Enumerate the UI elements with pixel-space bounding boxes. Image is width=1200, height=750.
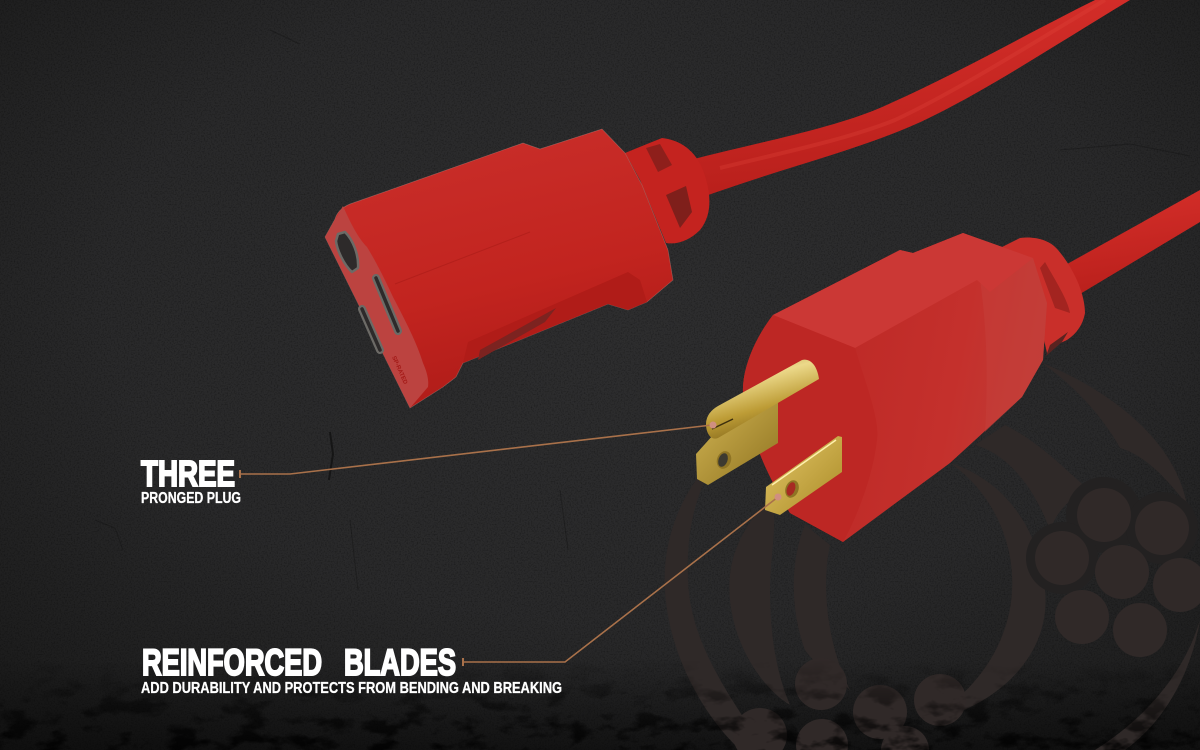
neutral blade: [696, 400, 778, 485]
callout: three pronged plug: [141, 422, 716, 507]
socket body: [325, 129, 673, 408]
plug face: [743, 315, 877, 542]
text: durability description: ADD DURABILITY AND PROTECTS FROM BENDING AND BREAKING: [141, 680, 562, 697]
socket cord: [690, 0, 1130, 198]
leader line to ground pin: [240, 422, 716, 478]
swirl crescents: [665, 362, 1200, 750]
strand circles: [733, 488, 1200, 750]
heading: reinforced blades: BLADES: [344, 642, 456, 683]
socket collar: [625, 138, 709, 243]
socket lower recess: [463, 272, 647, 363]
socket mould line: [395, 232, 530, 284]
plug cord: [1060, 190, 1200, 300]
plug lighter rear band: [980, 258, 1047, 432]
heading: reinforced blades: REINFORCED: [142, 642, 322, 683]
plug collar: [1002, 238, 1085, 356]
socket ground hole: [336, 232, 358, 272]
hot blade: [765, 436, 842, 515]
socket face: [325, 206, 428, 408]
ground pin: [706, 360, 819, 439]
socket connector: [325, 129, 709, 408]
strand halos: [1026, 477, 1198, 594]
background logo: swirl and strands: [665, 362, 1200, 750]
text: pronged plug: PRONGED PLUG: [141, 490, 241, 507]
plug connector: [696, 233, 1085, 542]
plug top facet: [773, 233, 1033, 348]
plug body: [743, 233, 1047, 542]
heading: three: THREE: [141, 453, 235, 494]
bottom grunge: [2, 679, 1200, 750]
socket hot and neutral slots: [362, 278, 398, 350]
leader line to hot blade: [463, 494, 782, 666]
socket moulded marking: SP-RATED: [390, 355, 408, 386]
callout: reinforced blades: [141, 494, 782, 697]
